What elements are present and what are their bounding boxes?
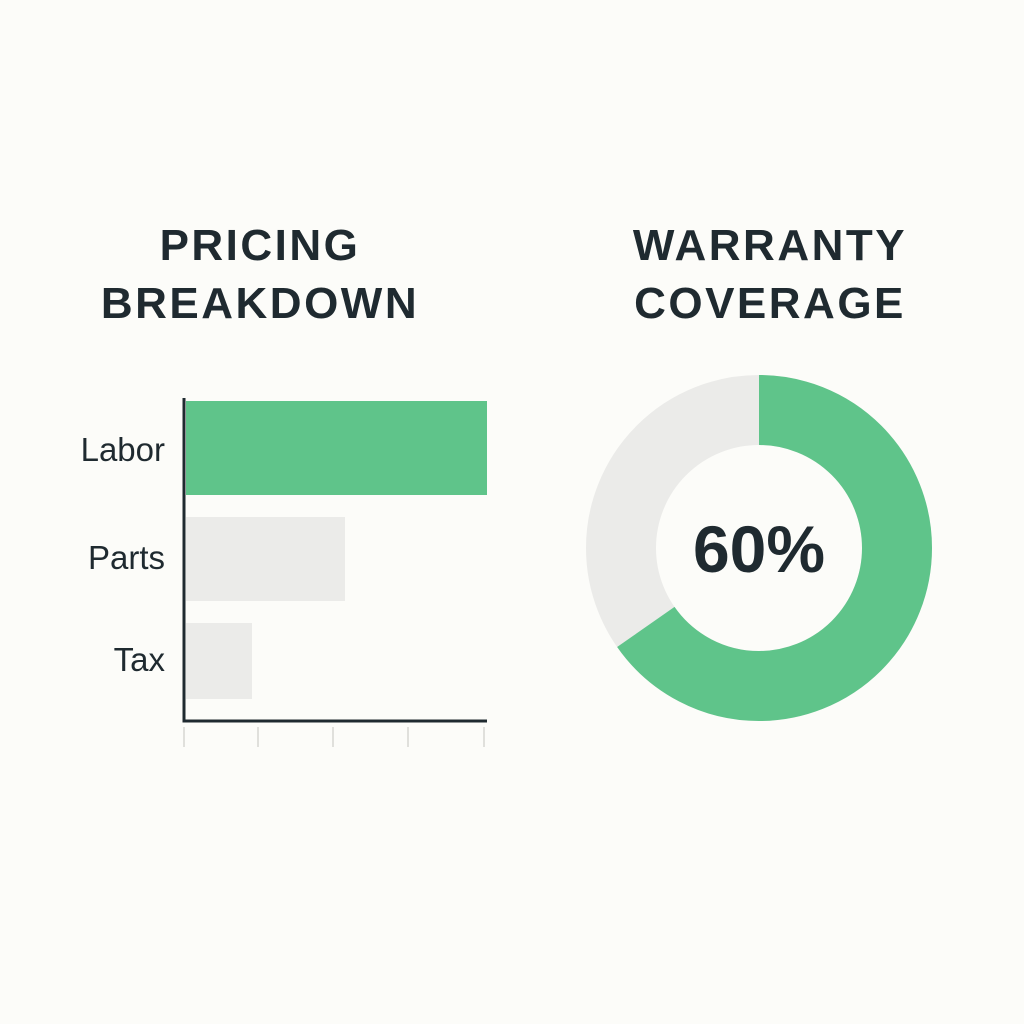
- donut chart: [586, 375, 932, 721]
- title: pricing breakdown: BREAKDOWN: [101, 279, 419, 328]
- label: tax: Tax: [114, 641, 165, 678]
- title: pricing breakdown: PRICING: [160, 221, 360, 270]
- axes: [184, 398, 487, 721]
- bar: labor: [186, 401, 487, 495]
- title: warranty coverage: COVERAGE: [634, 279, 906, 328]
- title: warranty coverage: WARRANTY: [633, 221, 907, 270]
- label: parts: Parts: [88, 539, 165, 576]
- title: warranty coverage: [632, 221, 907, 328]
- bar chart: [182, 398, 487, 747]
- title: pricing breakdown: [101, 221, 419, 328]
- bar: parts: [186, 517, 345, 601]
- bar: tax: [186, 623, 252, 699]
- label: labor: Labor: [81, 431, 165, 468]
- value: 60%: 60%: [693, 512, 825, 586]
